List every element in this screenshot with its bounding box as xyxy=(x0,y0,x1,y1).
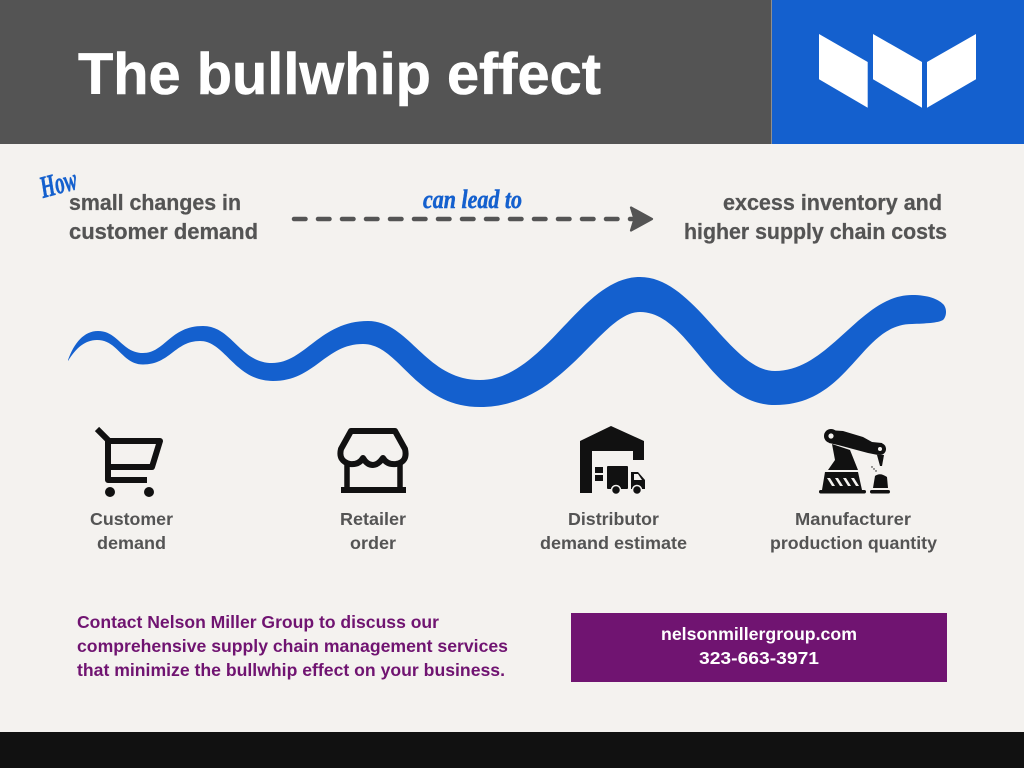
label: Retailer xyxy=(340,509,406,529)
label: production quantity xyxy=(770,533,937,553)
script words: can lead to: can lead to xyxy=(423,185,522,214)
label xyxy=(90,509,173,553)
footer band xyxy=(0,732,1024,768)
contact box: 323-663-3971 xyxy=(699,648,819,668)
icon: robot arm xyxy=(819,429,890,494)
intro left text: customer demand xyxy=(69,219,258,244)
script word: How: How xyxy=(35,161,81,205)
label xyxy=(770,509,937,553)
column: distributor xyxy=(540,426,687,553)
label xyxy=(540,509,687,553)
intro right text xyxy=(684,190,947,244)
intro left text xyxy=(69,190,258,244)
icon: shopping cart xyxy=(97,429,160,497)
intro right text: higher supply chain costs xyxy=(684,219,947,244)
contact text: comprehensive supply chain management services xyxy=(77,636,508,656)
contact text: Contact Nelson Miller Group to discuss our xyxy=(77,612,439,632)
column: customer demand xyxy=(90,429,173,553)
label xyxy=(340,509,406,553)
contact text: that minimize the bullwhip effect on your business. xyxy=(77,660,505,680)
intro right text: excess inventory and xyxy=(723,190,942,215)
title: The bullwhip effect xyxy=(78,42,601,107)
intro left text: small changes in xyxy=(69,190,241,215)
contact box xyxy=(571,613,947,682)
dashed arrow xyxy=(294,208,652,230)
contact box: nelsonmillergroup.com xyxy=(661,624,857,644)
column: manufacturer xyxy=(770,429,937,553)
label: demand xyxy=(97,533,166,553)
logo panel xyxy=(772,0,1024,144)
icon: warehouse and truck xyxy=(580,426,645,494)
column: retailer order xyxy=(340,431,406,553)
contact text xyxy=(77,612,508,680)
icon: storefront xyxy=(340,431,406,493)
label: Distributor xyxy=(568,509,659,529)
bullwhip wave xyxy=(68,277,946,407)
label: order xyxy=(350,533,396,553)
label: Manufacturer xyxy=(795,509,911,529)
label: demand estimate xyxy=(540,533,687,553)
header band xyxy=(0,0,772,144)
label: Customer xyxy=(90,509,173,529)
